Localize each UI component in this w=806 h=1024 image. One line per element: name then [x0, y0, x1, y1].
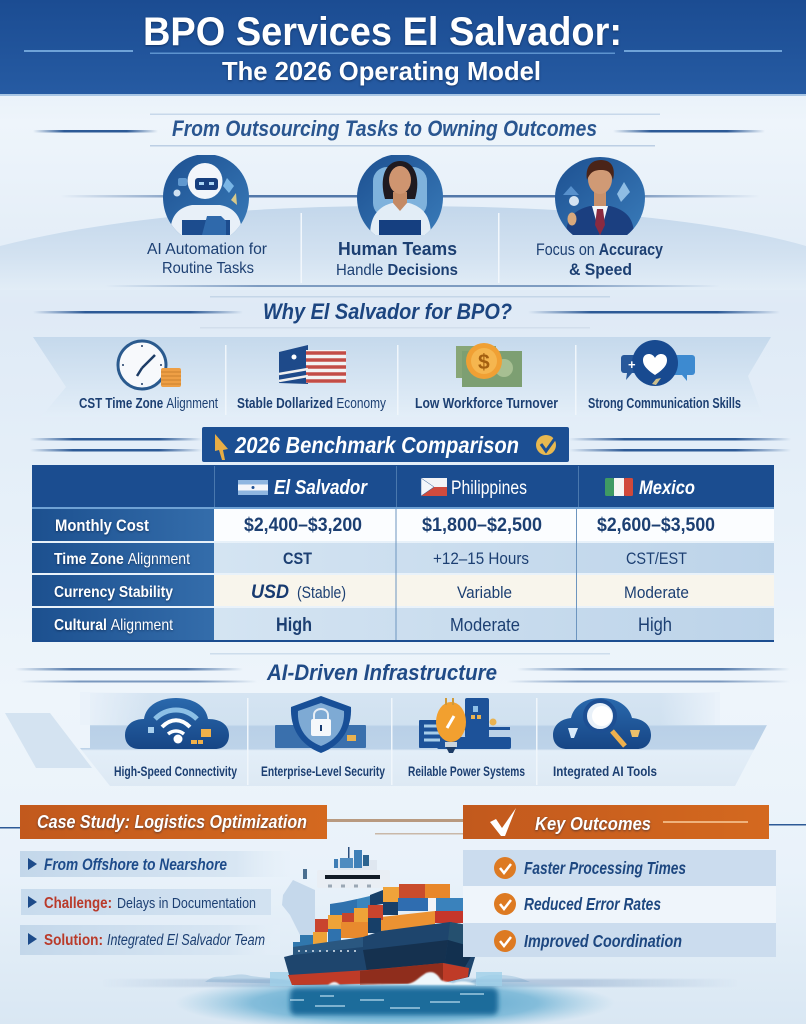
icon: flag — [279, 345, 346, 384]
row: cultural alignment: High — [276, 615, 312, 636]
case study heading: Case Study: Logistics Optimization — [37, 811, 307, 832]
row: currency stability — [32, 575, 774, 606]
icon: AI robot — [160, 155, 252, 237]
containers — [293, 884, 470, 950]
case row: challenge — [21, 889, 271, 915]
label: connectivity: High-Speed Connectivity — [114, 763, 237, 779]
table header — [32, 465, 774, 509]
label: human teams: Human Teams — [338, 239, 457, 259]
case study heading — [20, 805, 327, 839]
panel: outsourcing to outcomes — [0, 114, 806, 298]
label: accuracy and speed: & Speed — [569, 260, 632, 279]
panel: key outcomes — [463, 805, 806, 957]
table header: El Salvador — [274, 477, 368, 499]
icon: communication — [621, 340, 695, 386]
row: time zone alignment — [32, 543, 774, 573]
icon: wifi cloud — [125, 698, 229, 749]
case row: shift — [20, 851, 290, 877]
water — [175, 972, 615, 1024]
label: AI automation — [147, 241, 268, 277]
ribbon — [33, 337, 771, 417]
outcome: faster processing: Faster Processing Times — [524, 858, 686, 878]
panel: why El Salvador — [33, 299, 780, 417]
outcomes heading — [463, 805, 769, 839]
label: human teams: Handle Decisions — [336, 262, 458, 279]
hill background — [0, 206, 806, 290]
flag: Philippines — [421, 478, 447, 496]
icon: human team member — [355, 155, 445, 237]
table header: Mexico — [639, 477, 695, 499]
case row: shift: From Offshore to Nearshore — [44, 856, 227, 874]
row: cultural alignment: High — [638, 615, 672, 636]
outcome: reduced errors — [463, 886, 776, 923]
subtitle: The 2026 Operating Model — [222, 56, 541, 86]
panel: case study — [0, 805, 463, 955]
row: currency stability: (Stable) — [297, 584, 346, 602]
row: currency stability: Variable — [457, 583, 512, 602]
dividers — [300, 213, 302, 283]
row: time zone alignment: +12–15 Hours — [433, 549, 529, 568]
outcome: faster processing — [463, 850, 776, 886]
icon: check badge — [536, 435, 556, 455]
header banner — [0, 0, 806, 96]
hull red — [288, 963, 469, 985]
row: cultural alignment: Cultural Alignment — [54, 617, 173, 634]
row: currency stability: USD — [251, 582, 289, 603]
flag: El Salvador — [238, 480, 268, 495]
row: time zone alignment: Time Zone Alignment — [54, 551, 190, 568]
label: turnover: Low Workforce Turnover — [415, 396, 558, 412]
title: BPO Services El Salvador: — [143, 10, 622, 54]
icon: professional man — [553, 155, 647, 237]
row: currency stability: Moderate — [624, 583, 689, 602]
scene: ship and water — [100, 847, 740, 1024]
icon: AI tools cloud — [553, 698, 651, 749]
hull — [284, 922, 484, 985]
label: power: Reilable Power Systems — [408, 763, 525, 779]
case row: solution — [20, 925, 280, 955]
outcomes heading: Key Outcomes — [535, 813, 651, 834]
icon: communication: + — [628, 357, 636, 372]
icon: check — [490, 808, 516, 836]
label: AI automation: Routine Tasks — [162, 260, 254, 277]
icon: power bulb — [419, 698, 511, 753]
row: monthly cost: Monthly Cost — [55, 517, 149, 535]
label: security: Enterprise-Level Security — [261, 763, 385, 779]
icon: cursor — [215, 434, 228, 460]
cargo ship — [282, 847, 484, 985]
case row: solution: Solution: — [44, 932, 103, 949]
row: time zone alignment: CST/EST — [626, 549, 687, 568]
heading: From Outsourcing Tasks to Owning Outcomes — [172, 116, 597, 141]
case row: challenge: Delays in Documentation — [117, 895, 256, 912]
benchmark banner — [30, 427, 791, 462]
icon: security shield — [275, 696, 366, 753]
row: currency stability: Currency Stability — [54, 584, 173, 601]
row: cultural alignment — [32, 608, 774, 640]
flag: Mexico — [605, 478, 633, 496]
label: dollarized economy: Stable Dollarized Economy — [237, 396, 387, 412]
outcome: coordination — [463, 923, 776, 957]
icon: money: $ — [478, 351, 490, 374]
icon: clock — [118, 341, 181, 389]
row: monthly cost: $2,400–$3,200 — [244, 515, 362, 536]
outcome: reduced errors: Reduced Error Rates — [524, 894, 661, 914]
table header: Philippines — [451, 478, 527, 499]
heading: Why El Salvador for BPO? — [263, 299, 512, 324]
row: monthly cost: $2,600–$3,500 — [597, 515, 715, 536]
label: AI automation: AI Automation for — [147, 241, 268, 258]
ribbon — [5, 692, 767, 786]
row: monthly cost — [32, 509, 774, 541]
horizon — [100, 974, 740, 987]
label: communication: Strong Communication Skills — [588, 396, 741, 412]
label: accuracy and speed — [536, 241, 664, 279]
panel: AI infrastructure — [5, 653, 790, 786]
icon: money — [456, 343, 522, 387]
heading: 2026 Benchmark Comparison — [234, 432, 519, 458]
row: time zone alignment: CST — [283, 549, 313, 568]
foam — [328, 972, 477, 985]
case row: solution: Integrated El Salvador Team — [107, 932, 265, 949]
comparison table — [32, 465, 774, 642]
case row: challenge: Challenge: — [44, 895, 112, 912]
label: time zone: CST Time Zone Alignment — [79, 396, 218, 412]
pale funnel — [282, 880, 315, 935]
label: accuracy and speed: Focus on Accuracy — [536, 241, 664, 259]
superstructure — [303, 847, 390, 888]
row: monthly cost: $1,800–$2,500 — [422, 515, 542, 536]
outcome: coordination: Improved Coordination — [524, 931, 682, 951]
label: human teams — [336, 239, 458, 279]
label: AI tools: Integrated AI Tools — [553, 763, 657, 779]
heading: AI-Driven Infrastructure — [266, 660, 497, 685]
row: cultural alignment: Moderate — [450, 615, 520, 635]
